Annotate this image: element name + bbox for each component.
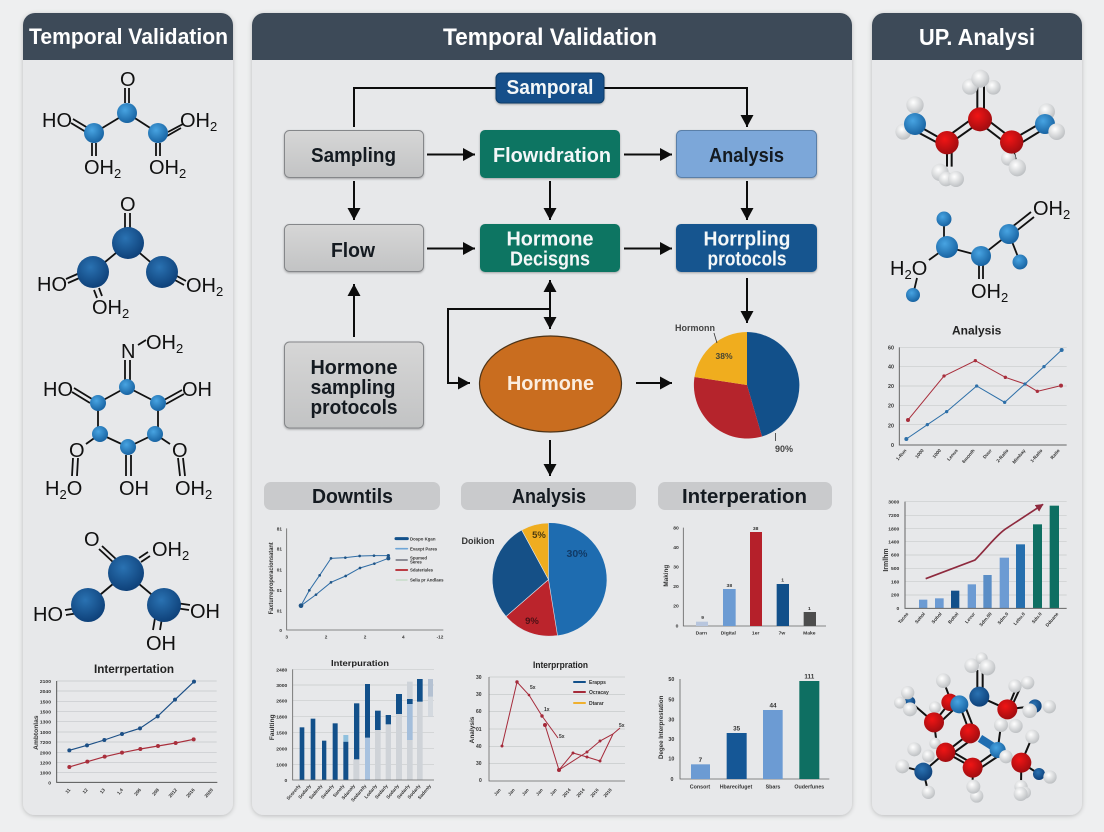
molecule 3: O [172,440,188,462]
bar chart: Interperation bottom: Ouderfunes [794,785,824,791]
molecule 3 [43,332,212,502]
box: Horrpling protocols [676,224,817,272]
line chart: Analysis: 0 [891,443,894,449]
stacked bar chart: Interpuration: Sodarly [374,783,389,800]
blue molecule: O [912,258,927,280]
bar and trend chart: 1800 [888,526,900,532]
bar chart: Interperation bottom: Hbarecifuget [720,785,753,791]
pie chart: Analysis: 9% [525,616,539,627]
heading: Downtils: Downtils [312,486,393,508]
line chart: Downtils: 81 [277,547,282,552]
left line chart: 11 [64,787,72,794]
top pie chart: 38% [715,351,733,361]
molecule 4 [33,529,220,655]
molecule 2: O [120,194,136,216]
line chart: Downtils: 01 [277,588,282,593]
left line chart: 208 [151,787,160,797]
molecule 3: H [45,478,59,500]
line chart: Interprpration: Jan [521,787,530,797]
line chart: Downtils: -12 [437,635,444,640]
bar and trend chart: 600 [891,553,900,559]
bar chart: Interperation bottom: 10 [668,757,674,763]
heading: Interperation [658,482,832,510]
panel: right analysis [872,13,1082,815]
line chart: Analysis: Mimbay [1011,448,1027,465]
bar chart: Interperation top: Making [663,565,670,587]
line chart: Analysis: Duur [982,448,993,460]
line chart: Interprpration: Analysis [469,716,476,743]
line chart: Analysis: Analysis [952,324,1002,338]
left line chart [33,662,217,799]
stacked bar chart: Interpuration: 1000 [276,762,288,768]
bar chart: Interperation top: Darn [696,630,707,636]
left line chart: 2040 [40,689,51,695]
right panel header [872,13,1082,60]
line chart: Interprpration [469,660,625,798]
stacked bar chart: Interpuration: Sodarly [385,783,400,800]
line chart: Interprpration: 1x [544,707,550,713]
bar chart: Interperation bottom: Sbars [766,785,780,791]
molecule 2: OH [92,297,122,319]
line chart: Interprpration: Dtarar [589,701,604,707]
bar chart: Interperation top: 38 [727,583,732,589]
bar chart: Interperation bottom: 50 [668,677,674,683]
bar and trend chart: 1400 [888,539,900,545]
left line chart: 0 [48,780,51,786]
molecule 1: OH [149,157,179,179]
centre panel header [252,13,852,60]
line chart: Analysis [888,324,1067,465]
box: Flowdration: Flowıdration [493,145,611,167]
molecule 4: OH [152,539,182,561]
stacked bar chart: Interpuration: Faulting [269,714,276,740]
line chart: Interprpration: 2018 [602,787,613,798]
molecule 1: 2 [114,166,121,181]
bar and trend chart: Sdu.0 [1031,611,1043,624]
line chart: Downtils: 2 [364,635,367,640]
stacked bar chart: Interpuration: Sodarly [297,783,312,800]
left line chart: 1000 [40,730,51,736]
line chart: Downtils: 81 [277,526,282,531]
bar and trend chart: 0 [897,606,900,612]
heading: Analysis: Analysis [512,486,586,508]
left line chart: 1300 [40,720,51,726]
bar and trend chart: Sdm.00 [978,611,993,627]
molecule 2: HO [37,274,67,296]
molecule 1: HO [42,110,72,132]
stacked bar chart: Interpuration: Sodarly [396,783,411,800]
box: Hormone sampling protocols: protocols [310,397,398,419]
box: Samporal: Samporal [506,77,594,99]
molecule 2: 2 [122,306,129,321]
stacked bar chart: Interpuration [269,658,434,803]
line chart: Interprpration: 5x [619,723,625,729]
left line chart: 1500 [40,709,51,715]
molecule 3: OH [182,379,212,401]
line chart: Interprpration: 30 [476,761,482,767]
3D molecule bottom [894,652,1057,803]
left line chart: 2012 [168,787,178,799]
line chart: Interprpration: Jan [493,787,502,797]
box: Hormone Decisgns: Decisgns [510,248,590,270]
molecule 3: O [69,440,85,462]
box: Sampling [284,130,424,178]
stacked bar chart: Interpuration: Lodarly [363,783,378,800]
pie chart: Analysis [462,523,607,636]
blue molecule: 2 [1063,207,1070,222]
line chart: Analysis: 60 [888,345,894,351]
bar and trend chart: 500 [891,566,900,572]
bar chart: Interperation top: 20 [673,604,679,610]
stacked bar chart: Interpuration: Sadenly [417,783,432,800]
panel: left molecules [23,13,233,815]
bar and trend chart: 7200 [888,513,900,519]
bar chart: Interperation bottom: 7 [699,757,703,764]
molecule 4: HO [33,604,63,626]
line chart: Interprpration: 60 [476,709,482,715]
stacked bar chart: Interpuration: 3000 [276,683,288,689]
box: Hormone Decisgns [480,224,620,272]
blue molecule: H [890,258,904,280]
line chart: Downtils: 4 [402,635,405,640]
line chart: Interprpration: Erapps [589,680,606,686]
left line chart: 206 [133,787,142,797]
box: Samporal [496,73,604,103]
line chart: Interprpration: 30 [476,692,482,698]
box: Sampling: Sampling [311,145,396,167]
molecule 4: O [84,529,100,551]
bar chart: Interperation bottom: Degee Interprestation [658,696,665,759]
bar chart: Interperation bottom: 44 [769,703,777,710]
line chart: Analysis: 1-Ratio [1029,448,1044,463]
stacked bar chart: Interpuration: Sodarelly [350,783,368,803]
left line chart: Ambtonlas [33,715,40,750]
bar and trend chart: 200 [891,593,900,599]
molecule 3: 2 [59,487,67,502]
line chart: Interprpration: 01 [476,727,482,733]
box: Flow: Flow [331,240,375,262]
top pie chart: 90% [775,444,793,454]
bar chart: Interperation bottom: 35 [733,726,741,733]
pie chart: Analysis: 30% [566,548,588,560]
line chart: Downtils: 3 [285,635,288,640]
box: Hormone sampling protocols [284,342,424,428]
bar chart: Interperation top [663,526,826,636]
line chart: Downtils: Faxturreproperacionsatant [268,542,275,614]
bar chart: Interperation top: 9 [701,615,704,621]
left line chart: 7200 [40,740,51,746]
stacked bar chart: Interpuration: 2000 [276,746,288,752]
molecule 2: OH [186,275,216,297]
line chart: Downtils [268,526,444,640]
molecule 3: 2 [205,487,212,502]
molecule 1: OH [180,110,210,132]
bar and trend chart: Tacos [897,611,910,625]
line chart: Interprpration: Ocracay [589,690,609,696]
bar chart: Interperation bottom: 30 [668,737,674,743]
bar and trend chart: Sohol [914,611,926,625]
line chart: Downtils: Seres [410,559,422,564]
molecule 2: 2 [216,284,223,299]
molecule 4: OH [190,601,220,623]
line chart: Analysis: 1000 [932,448,942,459]
line chart: Downtils: 0 [279,628,282,633]
molecule 3: OH [175,478,205,500]
heading: Analysis [461,482,636,510]
stacked bar chart: Interpuration: Sdanoly [341,783,356,801]
molecule 2 [37,194,223,321]
stacked bar chart: Interpuration: 2600 [276,699,288,705]
left line chart: 1,4 [116,787,124,796]
line chart: Interprpration: 30 [476,675,482,681]
box: Flowdration [480,130,620,178]
line chart: Analysis: 1-Run [895,448,908,461]
bar and trend chart: Dduane [1045,611,1060,628]
bar chart: Interperation top: 0 [676,624,679,630]
bar and trend chart: Sohol [931,611,943,625]
bar chart: Interperation top: 1 [781,578,784,584]
stacked bar chart: Interpuration: Sodarly [320,783,335,800]
stacked bar chart: Interpuration: Sanely [332,783,346,798]
line chart: Interprpration: Jan [507,787,516,797]
line chart: Downtils: Spumed [410,555,427,560]
molecule 1 [42,69,217,181]
line chart: Downtils: Selia pr Andlaes [410,578,444,583]
line chart: Interprpration: Jan [535,787,544,797]
top pie chart [675,323,799,454]
bar chart: Interperation top: Digital [721,630,737,636]
bar chart: Interperation top: 38 [753,526,759,532]
flow arrows [354,88,747,476]
line chart: Interprpration: Interprpration [533,660,588,671]
line chart: Analysis: 20 [888,384,894,390]
line chart: Analysis: 1000 [914,448,925,459]
bar and trend chart: Sdm.0 [997,611,1010,625]
bar chart: Interperation top: Make [803,630,816,636]
box: Hormone Decisgns: Hormone [506,228,594,250]
line chart: Downtils: 01 [277,568,282,573]
left line chart: 13 [99,787,106,795]
blue molecule: OH [1033,198,1063,220]
left line chart: 2016 [185,787,196,799]
bar and trend chart: Lebu.0 [1013,611,1026,626]
box: Horrpling protocols: Horrpling [704,228,790,250]
molecule 3: N [121,341,135,363]
top pie chart: Hormonn [675,323,715,334]
blue molecule: 2 [1001,290,1008,305]
line chart: Interprpration: 40 [476,744,482,750]
line chart: Analysis: Ratio [1049,448,1061,460]
line chart: Analysis: 40 [888,364,894,370]
box: Flow [284,224,424,272]
molecule 3: HO [43,379,73,401]
bar chart: Interperation bottom: 50 [668,697,674,703]
line chart: Analysis: 6month [961,448,976,464]
left line chart: 1000 [40,770,51,776]
bar chart: Interperation top: 80 [673,526,679,532]
left line chart: 1200 [40,760,51,766]
pie chart: Analysis: 5% [532,530,546,541]
bar chart: Interperation top: 7w [779,630,785,636]
centre panel header: Temporal Validation [443,24,657,51]
line chart: Analysis: Lenus [946,448,959,462]
box: Horrpling protocols: protocols [708,248,786,270]
panel: centre flow diagram [252,13,852,815]
bar chart: Interperation top: 30 [673,565,679,571]
left line chart: 12 [82,787,89,795]
stacked bar chart: Interpuration: 1500 [276,730,288,736]
blue molecule: OH [971,281,1001,303]
bar chart: Interperation bottom: 111 [804,674,815,681]
box: Hormone sampling protocols: Hormone [310,357,398,379]
bar and trend chart: 3000 [888,499,900,505]
box: Analysis [676,130,816,178]
stacked bar chart: Interpuration: Sadenly [308,783,324,800]
molecule 1: O [120,69,136,91]
bar chart: Interperation bottom: 0 [671,777,674,783]
right panel header: UP. Analysi [919,24,1035,50]
bar chart: Interperation top: 1 [808,606,811,612]
line chart: Analysis: 2-Ratio [995,448,1010,463]
line chart: Downtils: 2 [325,635,328,640]
line chart: Interprpration: 5x [559,734,565,740]
heading: Downtils [264,482,440,510]
stacked bar chart: Interpuration: Sodarly [407,783,422,800]
molecule 3: OH [119,478,149,500]
box: Analysis: Analysis [709,145,784,167]
left line chart: 2000 [40,750,51,756]
line chart: Downtils: Dospo Kgan [410,536,436,541]
chart title: Interrpertation [94,662,174,676]
left line chart: 1500 [40,699,51,705]
bar and trend chart: 160 [891,579,900,585]
molecule 3: OH [146,332,176,354]
box: Hormone sampling protocols: sampling [310,377,396,399]
blue molecule: 2 [904,267,912,282]
bar chart: Interperation bottom [658,674,829,791]
line chart: Interprpration: 5x [530,685,536,691]
line chart: Interprpration: 2014 [561,787,572,798]
molecule 1: 2 [210,119,217,134]
bar and trend chart: Irmlhm [883,548,890,572]
blue molecule [890,198,1070,305]
left line chart: 2020 [204,787,214,799]
bar chart: Interperation top: 40 [673,545,679,551]
stacked bar chart: Interpuration: 2480 [276,667,288,673]
line chart: Downtils: Evaxpt Pares [410,546,438,551]
line chart: Analysis: 20 [888,423,894,429]
molecule 1: OH [84,157,114,179]
molecule 4: OH [146,633,176,655]
molecule 4: 2 [182,548,189,563]
stacked bar chart: Interpuration: 0 [285,778,288,784]
bar chart: Interperation bottom: 30 [668,717,674,723]
stacked bar chart: Interpuration: Scorerly [286,783,302,801]
left line chart: 2100 [40,679,51,685]
heading: Interperation: Interperation [682,486,807,508]
line chart: Analysis: 20 [888,403,894,409]
bar and trend chart [883,499,1067,628]
molecule 1: 2 [179,166,186,181]
stacked bar chart: Interpuration: Interpuration [331,658,389,668]
line chart: Interprpration: 2014 [575,787,586,798]
line chart: Interprpration: 2016 [589,787,600,798]
pie chart: Analysis: Doikion [462,536,494,546]
line chart: Interprpration: Jan [549,787,558,797]
molecule 3: 2 [176,341,183,356]
bar and trend chart: Bohol [947,611,959,625]
bar chart: Interperation top: 20 [673,584,679,590]
left panel header [23,13,233,60]
bar chart: Interperation bottom: Consort [690,785,710,791]
line chart: Interprpration: 0 [479,778,482,784]
stacked bar chart: Interpuration: 1800 [276,715,288,721]
line chart: Downtils: Sdateriales [410,568,434,573]
bar and trend chart: Levur [964,611,976,624]
line chart: Downtils: 01 [277,608,282,613]
left panel header: Temporal Validation [29,24,228,49]
bar chart: Interperation top: 1er [752,630,759,636]
molecule 3: O [67,478,82,500]
ellipse: Hormone: Hormone [507,373,594,395]
ellipse: Hormone [480,336,622,432]
3D molecule top [895,70,1065,187]
